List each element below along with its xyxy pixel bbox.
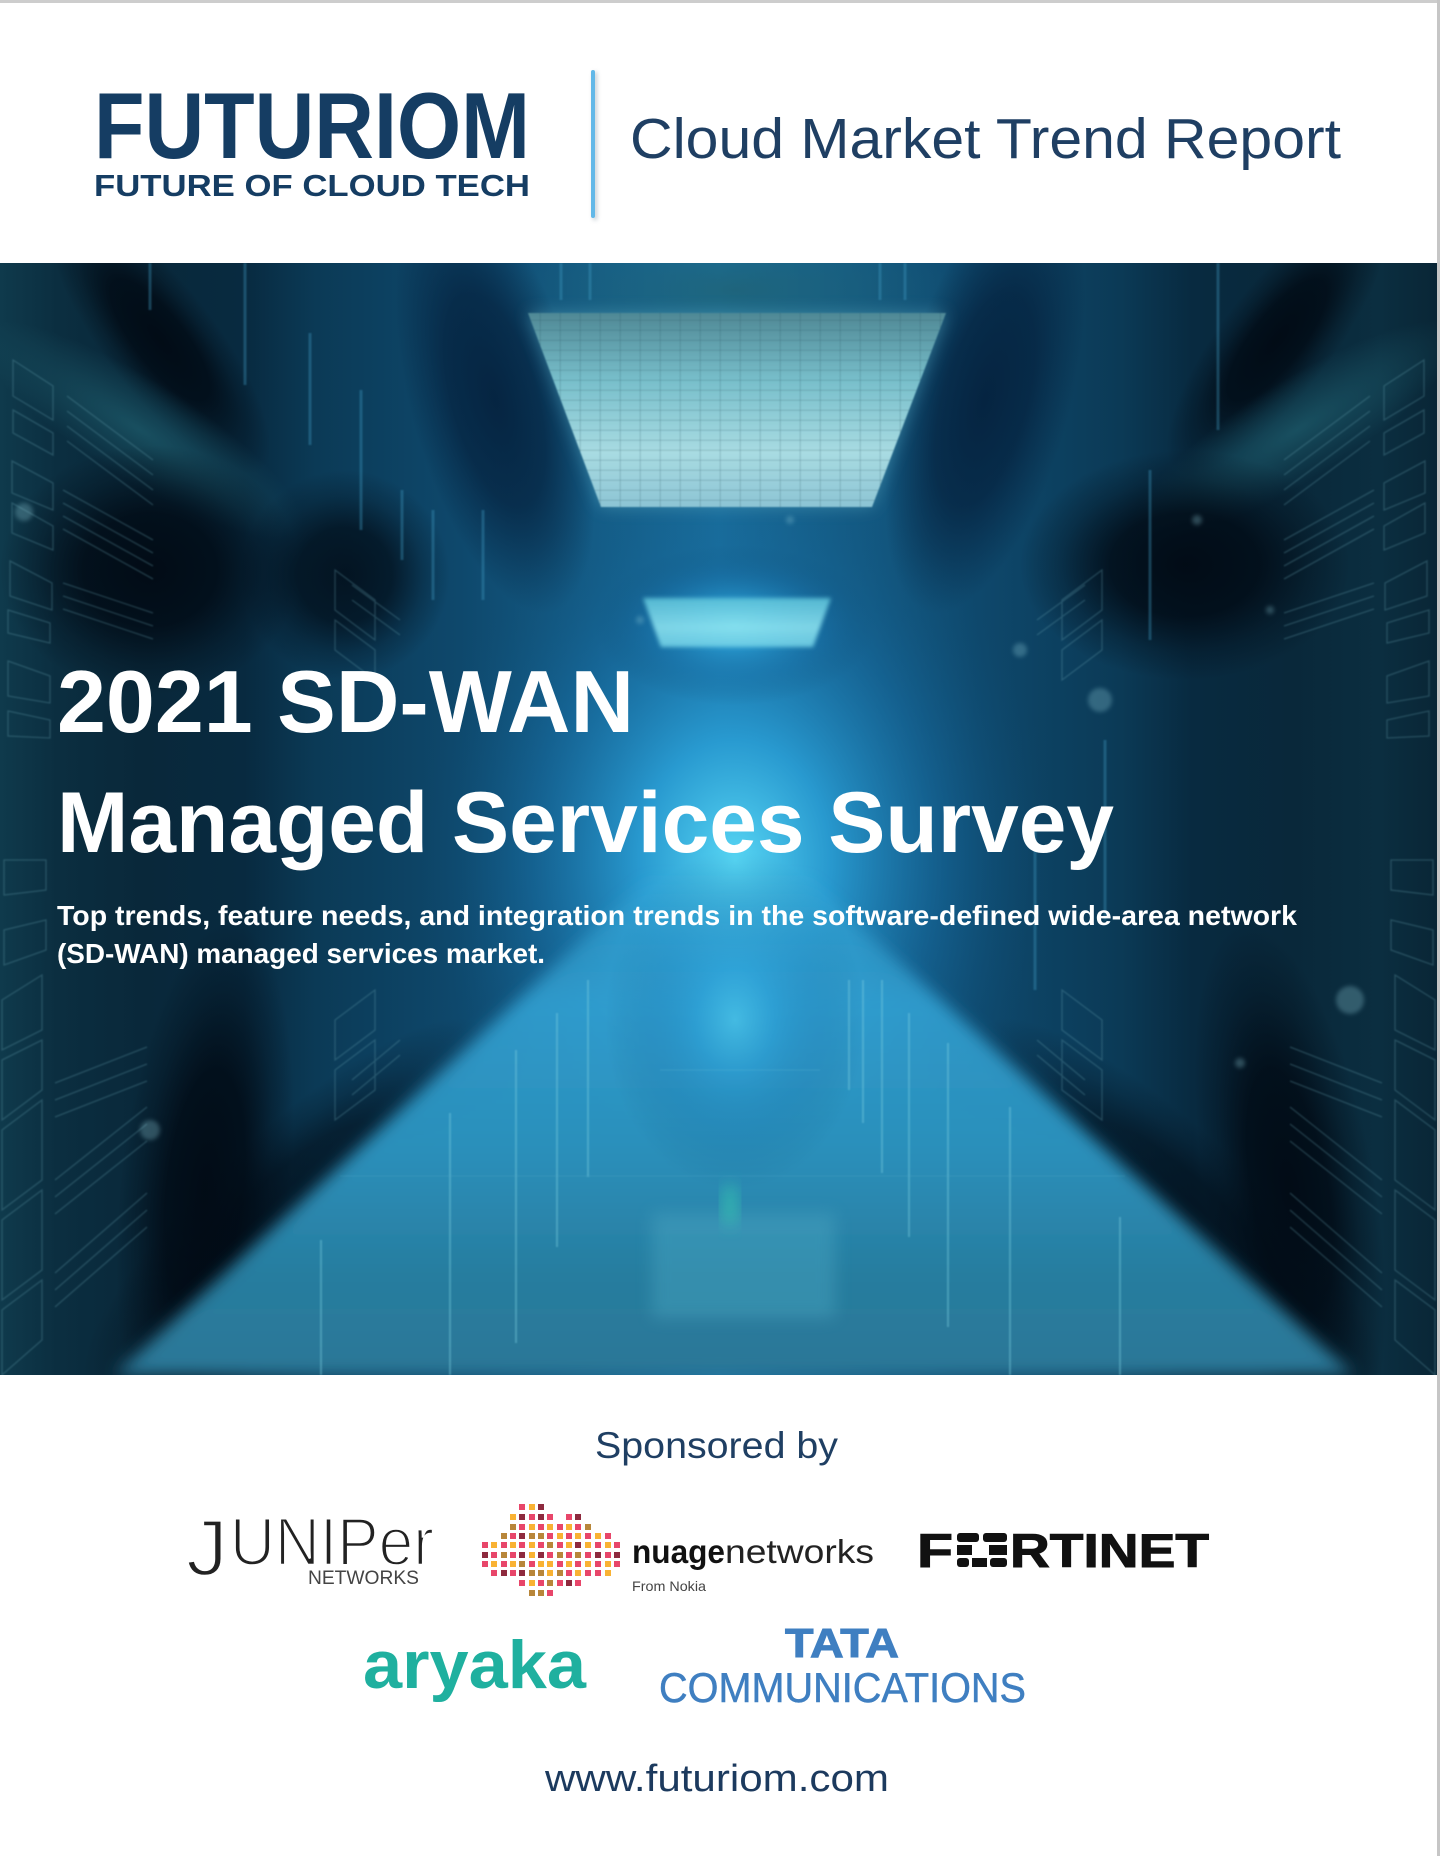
logo: Juniper Networks: J [186, 1503, 228, 1592]
logo: Aryaka: aryaka [363, 1627, 587, 1703]
ceiling wash [610, 263, 842, 313]
corridor floor [115, 880, 1354, 1375]
hero subtitle [57, 900, 1297, 969]
hero title: Managed Services Survey [57, 775, 1114, 871]
logo: Fortinet [917, 1524, 1209, 1577]
logo: Tata Communications: COMMUNICATIONS [659, 1664, 1026, 1711]
logo: Tata Communications [659, 1620, 1026, 1711]
central glow [480, 618, 997, 1006]
logo: Nuage Networks: From Nokia [632, 1578, 706, 1594]
distant ceiling light [642, 580, 832, 662]
vertical wall lights [150, 263, 1218, 990]
hero subtitle: (SD-WAN) managed services market. [57, 938, 545, 969]
ceiling light halo [528, 313, 946, 507]
logo: Fortinet: O [960, 1524, 1004, 1577]
icon: Fortinet block O [957, 1533, 1007, 1567]
logo: Futuriom: FUTURIOM [94, 73, 530, 178]
sponsored by heading: Sponsored by [595, 1425, 839, 1466]
logo: Nuage Networks: networks [725, 1533, 874, 1570]
floor guide lines [321, 980, 1125, 1375]
logo: Fortinet: RTINET [1010, 1524, 1209, 1577]
header divider [591, 70, 597, 220]
wall shading [18, 263, 1427, 1375]
logo: Nuage Networks: nuage [632, 1533, 725, 1570]
hero title [57, 652, 1114, 871]
server racks: right wall [1037, 360, 1435, 1375]
hero image: data centre corridor [0, 263, 1437, 1375]
logo: Juniper Networks [186, 1503, 434, 1592]
network nodes [15, 503, 1364, 1140]
website: www.futuriom.com [544, 1758, 889, 1800]
logo: Juniper Networks: UNIPer [230, 1504, 434, 1580]
logo: Juniper Networks: NETWORKS [308, 1568, 419, 1589]
icon: nuage dot cloud [482, 1504, 620, 1596]
hero subtitle: Top trends, feature needs, and integration trends in the software-defined wide-area network [57, 900, 1297, 931]
logo: Fortinet: F [917, 1524, 953, 1577]
report label: Cloud Market Trend Report [630, 107, 1341, 171]
logo: Nuage Networks [482, 1504, 874, 1596]
hero title: 2021 SD-WAN [57, 652, 634, 751]
ceiling light panel [528, 313, 946, 507]
logo: Tata Communications: TATA [785, 1620, 899, 1666]
server racks: left wall [2, 360, 400, 1375]
logo: Futuriom: FUTURE OF CLOUD TECH [94, 168, 530, 203]
